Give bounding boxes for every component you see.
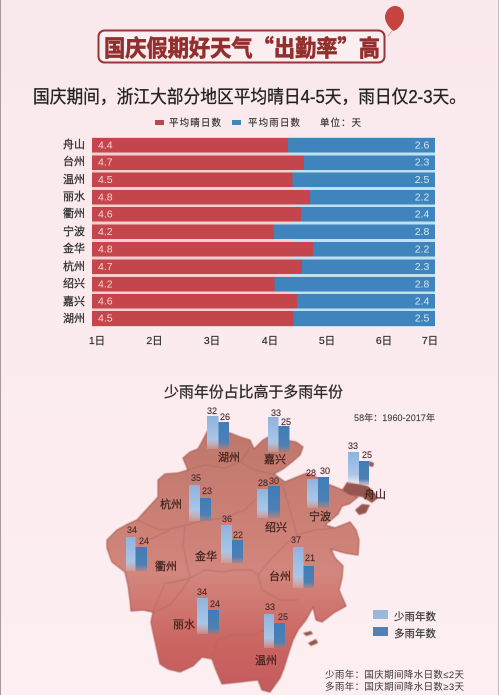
chart legend: [155, 117, 361, 129]
map legend: [373, 610, 436, 640]
bar pair: 丽水: [197, 587, 220, 634]
row: 温州: [63, 172, 435, 187]
bar pair: 舟山: 33: [348, 441, 358, 451]
map: Zhejiang: [107, 430, 378, 692]
islands: [303, 461, 378, 646]
row: 嘉兴: 2.4: [415, 296, 429, 308]
city labels: 金华: [195, 549, 217, 563]
bar pair: 绍兴: [257, 476, 280, 518]
city labels: 绍兴: [265, 520, 287, 534]
bar pair: 湖州: 32: [207, 406, 217, 416]
row: 台州: [63, 154, 435, 170]
bar pair: 金华: [221, 514, 243, 563]
bar pair: 金华: 22: [233, 530, 243, 540]
map heading: 少雨年份占比高于多雨年份: [164, 384, 343, 401]
row: 温州: 2.5: [415, 174, 429, 186]
row: 金华: 金华: [63, 241, 85, 255]
bar pair: 温州: 25: [278, 612, 288, 622]
row: 金华: 2.2: [415, 244, 429, 256]
row: 丽水: 丽水: [63, 190, 85, 203]
chart axis labels: 7日: [422, 335, 438, 347]
bar pair: 湖州: [207, 406, 230, 449]
bar pair: 台州: 21: [305, 553, 315, 563]
bar pair: 丽水: 24: [210, 599, 220, 609]
district borders: [137, 448, 335, 659]
definition notes: 少雨年：国庆期间降水日数≤2天: [325, 669, 464, 681]
city labels: 丽水: [173, 618, 195, 631]
chart legend: 单位：天: [320, 117, 361, 129]
city labels: 杭州: [160, 497, 182, 511]
chart axis labels: 3日: [204, 335, 220, 347]
city labels: 舟山: [364, 487, 386, 501]
row: 衢州: 衢州: [63, 207, 85, 220]
row: 宁波: 宁波: [63, 224, 85, 238]
map legend: 多雨年数: [394, 627, 436, 640]
bar pair: 湖州: 26: [220, 412, 230, 422]
bar pair: 杭州: 35: [191, 473, 201, 483]
bar pair: 宁波: 30: [320, 466, 330, 476]
city labels: 温州: [255, 654, 277, 667]
bar pair: 嘉兴: [268, 408, 291, 452]
row: 湖州: 湖州: [63, 312, 85, 325]
bar pair: 衢州: 34: [127, 525, 137, 535]
city labels: 宁波: [309, 509, 331, 523]
chart axis labels: [89, 335, 438, 347]
bar pair: 绍兴: 30: [269, 476, 279, 486]
title: 国庆假期好天气“出勤率”高: [104, 29, 380, 63]
bar pair: 衢州: 24: [139, 536, 149, 546]
row: 舟山: 4.4: [98, 140, 113, 152]
subtitle: 国庆期间，浙江大部分地区平均晴日4-5天，雨日仅2-3天。: [33, 87, 466, 107]
row: 衢州: [63, 207, 435, 222]
row: 宁波: 4.2: [98, 226, 113, 238]
bar pair: 台州: [291, 535, 315, 588]
row: 湖州: [63, 311, 435, 326]
bar pair: 嘉兴: 25: [281, 417, 291, 427]
bar pair: 宁波: 28: [306, 468, 316, 478]
bar pair: 温州: [264, 602, 288, 648]
bar pair: 温州: 33: [265, 602, 275, 612]
bar pair: 丽水: 34: [197, 587, 207, 597]
row: 嘉兴: 嘉兴: [63, 294, 85, 308]
bar pair: 宁波: [306, 466, 330, 508]
row: 湖州: 2.5: [415, 312, 429, 324]
row: 金华: 4.8: [98, 244, 113, 256]
row: 绍兴: 2.8: [415, 278, 429, 290]
bar pair: 台州: 37: [291, 535, 301, 545]
row: 衢州: 2.4: [415, 208, 429, 220]
city labels: 衢州: [155, 560, 177, 573]
row: 湖州: 4.5: [98, 312, 113, 324]
row: 温州: 温州: [63, 173, 85, 186]
row: 台州: 4.7: [98, 156, 113, 168]
definition notes: 多雨年：国庆期间降水日数≥3天: [325, 681, 464, 693]
bar pair: 绍兴: 28: [258, 478, 268, 488]
period note: 58年：1960-2017年: [354, 412, 435, 423]
row: 金华: [63, 241, 435, 256]
city labels: 湖州: [218, 451, 240, 464]
row: 丽水: 2.2: [415, 192, 429, 204]
city labels: [155, 451, 386, 667]
row: 嘉兴: 4.6: [98, 296, 113, 308]
row: 舟山: 舟山: [63, 137, 85, 151]
row: 温州: 4.5: [98, 174, 113, 186]
row: 绍兴: 4.2: [98, 278, 113, 290]
row: 杭州: 杭州: [63, 259, 85, 273]
bar pair: 嘉兴: 33: [271, 408, 281, 418]
city labels: 嘉兴: [264, 452, 286, 466]
bar pair: 金华: 36: [222, 514, 232, 524]
chart axis labels: 4日: [262, 335, 278, 347]
row: 衢州: 4.6: [98, 208, 113, 220]
chart legend: 平均晴日数: [169, 117, 221, 129]
definition notes: [325, 669, 464, 693]
stacked bar chart: [63, 137, 435, 327]
icon: balloon: [385, 6, 404, 36]
row: 杭州: 4.7: [98, 261, 113, 273]
chart axis labels: 2日: [146, 335, 163, 347]
row: 绍兴: 绍兴: [63, 276, 85, 290]
row: 丽水: 4.8: [98, 192, 113, 204]
chart axis labels: 5日: [319, 335, 335, 347]
city labels: 台州: [269, 569, 291, 583]
bar pair: 衢州: [126, 525, 149, 571]
bar pair: 杭州: 23: [202, 486, 212, 496]
bar pair: 舟山: 25: [362, 450, 372, 460]
chart legend: 平均雨日数: [248, 117, 300, 129]
row: 嘉兴: [63, 294, 435, 308]
chart axis labels: 6日: [376, 335, 392, 347]
map legend: 少雨年数: [394, 610, 436, 623]
row: 台州: 台州: [63, 154, 85, 168]
row: 宁波: 2.8: [415, 226, 429, 238]
row: 丽水: [63, 190, 435, 204]
row: 舟山: [63, 137, 435, 152]
row: 绍兴: [63, 276, 435, 292]
row: 台州: 2.3: [415, 156, 429, 168]
row: 舟山: 2.6: [415, 140, 429, 152]
chart axis labels: 1日: [89, 335, 105, 347]
row: 宁波: [63, 224, 435, 239]
row: 杭州: 2.3: [415, 261, 429, 273]
bar pair: 杭州: [189, 473, 212, 521]
row: 杭州: [63, 259, 435, 274]
bar pair: 舟山: [348, 441, 372, 485]
